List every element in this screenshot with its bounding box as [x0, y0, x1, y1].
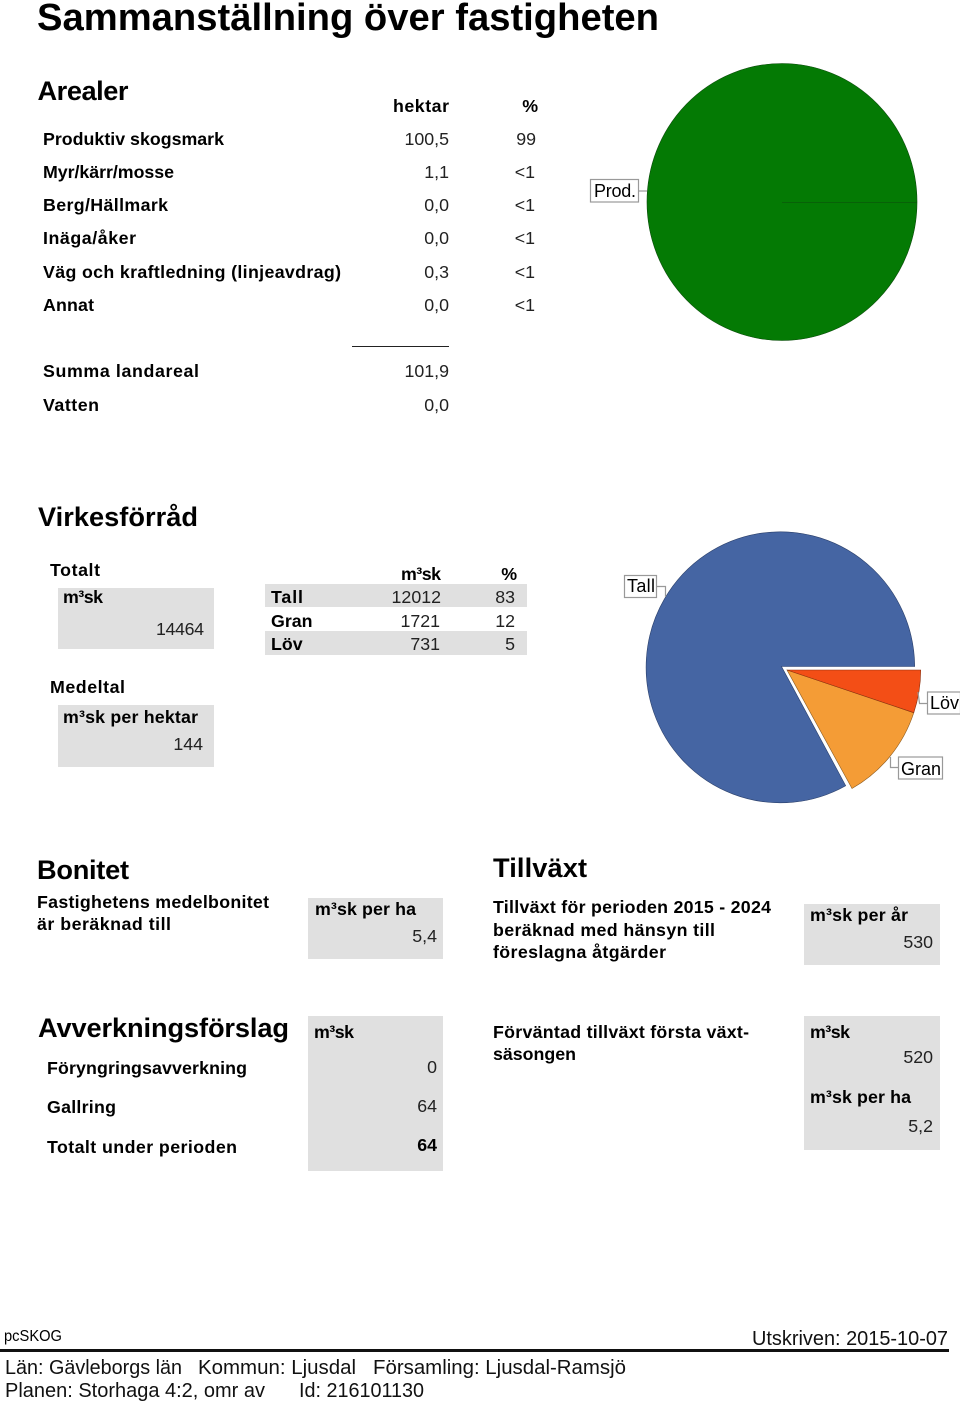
footer: [0, 1328, 949, 1402]
row: väg och kraftledning: [43, 262, 535, 282]
card: förväntad tillväxt values: m³sk: [810, 1022, 850, 1042]
row: summa landareal: [43, 361, 449, 381]
pie label: löv: Löv: [930, 693, 959, 713]
row: myr: [43, 162, 535, 182]
row: myr: Myr/kärr/mosse: [43, 162, 174, 182]
table header: arealer: hektar: [393, 96, 449, 116]
panel: arealer: [38, 75, 538, 415]
table: trädslag: 1721: [400, 611, 440, 631]
heading: arealer: Arealer: [38, 75, 129, 106]
row: inäga: 0,0: [424, 228, 449, 248]
pie label: gran: [890, 757, 942, 779]
pie label: gran: Gran: [901, 759, 941, 779]
card: medeltal: 144: [173, 734, 203, 754]
footer: Församling: Ljusdal-Ramsjö: [373, 1357, 626, 1379]
table: avverkning: Föryngringsavverkning: [47, 1058, 247, 1078]
pie label: prod: Prod.: [594, 181, 636, 201]
card: totalt: Totalt: [50, 560, 100, 580]
card: medeltal: Medeltal: [50, 677, 125, 697]
text: tillväxt för perioden: beräknad med hänsyn till: [493, 920, 715, 940]
table: avverkning: 64: [417, 1096, 437, 1116]
row: vatten: [43, 395, 449, 415]
table: trädslag: 12: [495, 611, 515, 631]
card: medeltal: [50, 677, 214, 767]
row: produktiv skogsmark: [43, 129, 536, 149]
text: förväntad tillväxt: [493, 1022, 749, 1064]
text: förväntad tillväxt: Förväntad tillväxt första växt-: [493, 1022, 749, 1042]
table header: arealer: %: [522, 96, 538, 116]
table: trädslag: %: [501, 564, 517, 584]
text: medelbonitet: Fastighetens medelbonitet: [37, 892, 269, 912]
card: medeltal: m³sk per hektar: [63, 707, 198, 727]
card: totalt: [50, 560, 214, 649]
row: produktiv skogsmark: 99: [516, 129, 536, 149]
footer: Utskriven: 2015-10-07: [752, 1328, 948, 1350]
card: bonitet value: [308, 898, 443, 959]
table: trädslag: Gran: [271, 611, 313, 631]
text: medelbonitet: är beräknad till: [37, 914, 171, 934]
pie chart: arealer: [590, 64, 917, 340]
card: totalt: m³sk: [63, 587, 103, 607]
footer: Kommun: Ljusdal: [198, 1357, 356, 1379]
pie chart: virkesförråd: [624, 532, 960, 803]
panel: förväntad tillväxt: [493, 1016, 940, 1150]
table: trädslag: Löv: [271, 634, 303, 654]
text: medelbonitet: [37, 892, 269, 934]
text: tillväxt för perioden: Tillväxt för perioden 2015 - 2024: [493, 897, 771, 917]
panel: avverkningsförslag: [38, 1012, 443, 1171]
table: trädslag: 731: [410, 634, 440, 654]
pie label: tall: Tall: [627, 576, 655, 596]
table: avverkning: [47, 1016, 443, 1171]
row: väg och kraftledning: Väg och kraftledning (linjeavdrag): [43, 262, 341, 282]
table: avverkning: 0: [427, 1057, 437, 1077]
row: inäga: [43, 228, 535, 248]
row: berg: Berg/Hällmark: [43, 195, 168, 215]
heading: virkesförråd: Virkesförråd: [38, 501, 198, 532]
heading: avverkningsförslag: Avverkningsförslag: [38, 1012, 289, 1043]
row: annat: <1: [515, 295, 535, 315]
table: trädslag: [265, 564, 527, 655]
panel: bonitet: [37, 854, 443, 959]
card: tillväxt value: [804, 904, 940, 965]
table: trädslag: 83: [495, 587, 515, 607]
card: tillväxt value: 530: [903, 932, 933, 952]
pie label: löv: [918, 692, 960, 714]
row: annat: [43, 295, 535, 315]
footer: Planen: Storhaga 4:2, omr av: [5, 1380, 266, 1402]
footer: Län: Gävleborgs län: [5, 1357, 182, 1379]
row: summa landareal: Summa landareal: [43, 361, 199, 381]
card: bonitet value: 5,4: [412, 926, 437, 946]
heading: bonitet: Bonitet: [37, 854, 129, 885]
footer: pcSKOG: [4, 1328, 62, 1345]
row: väg och kraftledning: 0,3: [424, 262, 449, 282]
card: förväntad tillväxt values: [804, 1016, 940, 1150]
card: totalt: 14464: [156, 619, 204, 639]
panel: virkesförråd: [38, 501, 527, 767]
row: myr: 1,1: [424, 162, 449, 182]
text: tillväxt för perioden: [493, 897, 771, 962]
row: annat: Annat: [43, 295, 94, 315]
heading: tillväxt: Tillväxt: [493, 852, 587, 883]
table: avverkning: Totalt under perioden: [47, 1137, 237, 1157]
footer: Id: 216101130: [299, 1380, 424, 1402]
row: berg: <1: [515, 195, 535, 215]
card: tillväxt value: m³sk per år: [810, 905, 908, 925]
table: trädslag: 5: [505, 634, 515, 654]
table: trädslag: m³sk: [401, 564, 441, 584]
row: inäga: Inäga/åker: [43, 228, 136, 248]
table: avverkning: m³sk: [314, 1022, 354, 1042]
row: inäga: <1: [515, 228, 535, 248]
row: annat: 0,0: [424, 295, 449, 315]
row: väg och kraftledning: <1: [515, 262, 535, 282]
slice: gran: [787, 670, 914, 788]
row: summa landareal: 101,9: [404, 361, 449, 381]
table: avverkning: 64: [417, 1135, 437, 1155]
text: tillväxt för perioden: föreslagna åtgärder: [493, 942, 666, 962]
row: berg: 0,0: [424, 195, 449, 215]
text: förväntad tillväxt: säsongen: [493, 1044, 576, 1064]
row: produktiv skogsmark: Produktiv skogsmark: [43, 129, 224, 149]
row: myr: <1: [515, 162, 535, 182]
table header: arealer: [393, 96, 538, 116]
panel: tillväxt: [493, 852, 940, 965]
row: berg: [43, 195, 535, 215]
slice: tall: [646, 532, 915, 803]
row: vatten: Vatten: [43, 395, 99, 415]
card: bonitet value: m³sk per ha: [315, 899, 416, 919]
row: produktiv skogsmark: 100,5: [404, 129, 449, 149]
card: förväntad tillväxt values: 5,2: [908, 1116, 933, 1136]
card: förväntad tillväxt values: 520: [903, 1047, 933, 1067]
pie label: prod: [590, 180, 647, 202]
card: förväntad tillväxt values: m³sk per ha: [810, 1087, 911, 1107]
row: vatten: 0,0: [424, 395, 449, 415]
slice: löv: [787, 670, 921, 713]
table: avverkning: Gallring: [47, 1097, 116, 1117]
table: trädslag: Tall: [271, 587, 303, 607]
pie label: tall: [624, 576, 666, 598]
table: trädslag: 12012: [392, 587, 441, 607]
